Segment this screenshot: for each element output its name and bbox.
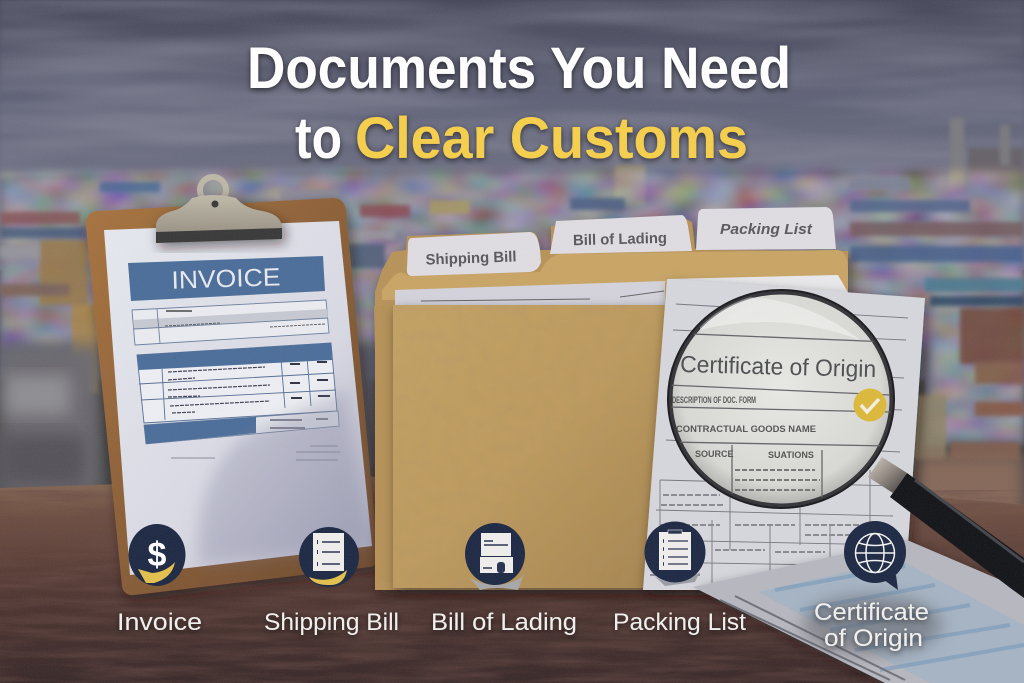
handle — [868, 457, 1024, 598]
invoice line-items table — [137, 343, 337, 423]
label: Certificate of Origin: Certificate — [814, 599, 929, 626]
certificate document — [643, 275, 925, 590]
tab: Packing List — [696, 207, 836, 250]
tab: Shipping Bill: Shipping Bill — [425, 248, 517, 269]
title — [247, 36, 791, 171]
yellow check badge — [854, 388, 886, 422]
icon: globe speech bubble — [844, 521, 906, 590]
magnifying glass — [668, 290, 1024, 598]
title line 1: Documents You Need — [247, 36, 791, 101]
icon: shipping bill — [299, 527, 359, 587]
folder front panel — [393, 305, 668, 588]
icon: invoice dollar — [128, 524, 186, 586]
invoice header band: INVOICE — [171, 263, 281, 295]
invoice total row — [144, 411, 339, 444]
loose papers on table — [693, 540, 1024, 683]
invoice footer lines — [171, 446, 340, 460]
papers inside folder — [395, 281, 665, 306]
document form lines — [648, 304, 908, 585]
icon: bill of lading — [465, 523, 525, 590]
document folder — [374, 207, 848, 590]
label: Packing List: Packing List — [613, 609, 746, 636]
folder left flap — [374, 306, 393, 582]
lens content: Certificate of Origin — [680, 351, 876, 382]
invoice header band — [128, 256, 325, 301]
icon: packing list — [644, 522, 706, 586]
tab: Shipping Bill — [407, 232, 541, 276]
label backdrop — [802, 595, 942, 655]
folder back panel and tabs — [375, 216, 848, 590]
background: sky — [0, 0, 1024, 270]
icon: invoice dollar: $ — [148, 536, 167, 574]
clipboard with invoice — [86, 177, 378, 595]
background: blurred container port — [0, 118, 1024, 460]
label: Certificate of Origin — [814, 599, 929, 652]
tab: Packing List: Packing List — [720, 221, 813, 238]
lens content: SUATIONS — [768, 450, 814, 460]
label: Shipping Bill: Shipping Bill — [264, 609, 399, 636]
invoice details table — [132, 300, 329, 345]
lens content: CONTRACTUAL GOODS NAME — [676, 424, 816, 434]
clipboard board — [86, 198, 378, 595]
lens content — [668, 297, 890, 510]
lens content: SOURCE — [695, 449, 734, 459]
label: Bill of Lading: Bill of Lading — [431, 609, 577, 636]
page stack — [668, 275, 850, 300]
background: hazy ground at left — [0, 345, 1024, 545]
metal clip — [156, 177, 282, 243]
label: Invoice: Invoice — [117, 609, 202, 636]
lens — [668, 290, 894, 510]
lens content: DESCRIPTION OF DOC. FORM — [672, 395, 756, 405]
label: Certificate of Origin: of Origin — [824, 625, 923, 652]
title word: to: to — [295, 106, 342, 171]
tab: Bill of Lading — [550, 215, 692, 254]
title highlight: Clear Customs: Clear Customs — [355, 106, 748, 171]
tab: Bill of Lading: Bill of Lading — [573, 230, 667, 249]
paper shadow — [198, 390, 372, 565]
background: wooden table — [0, 470, 1024, 683]
document sheet — [643, 279, 925, 590]
invoice paper — [104, 221, 372, 575]
